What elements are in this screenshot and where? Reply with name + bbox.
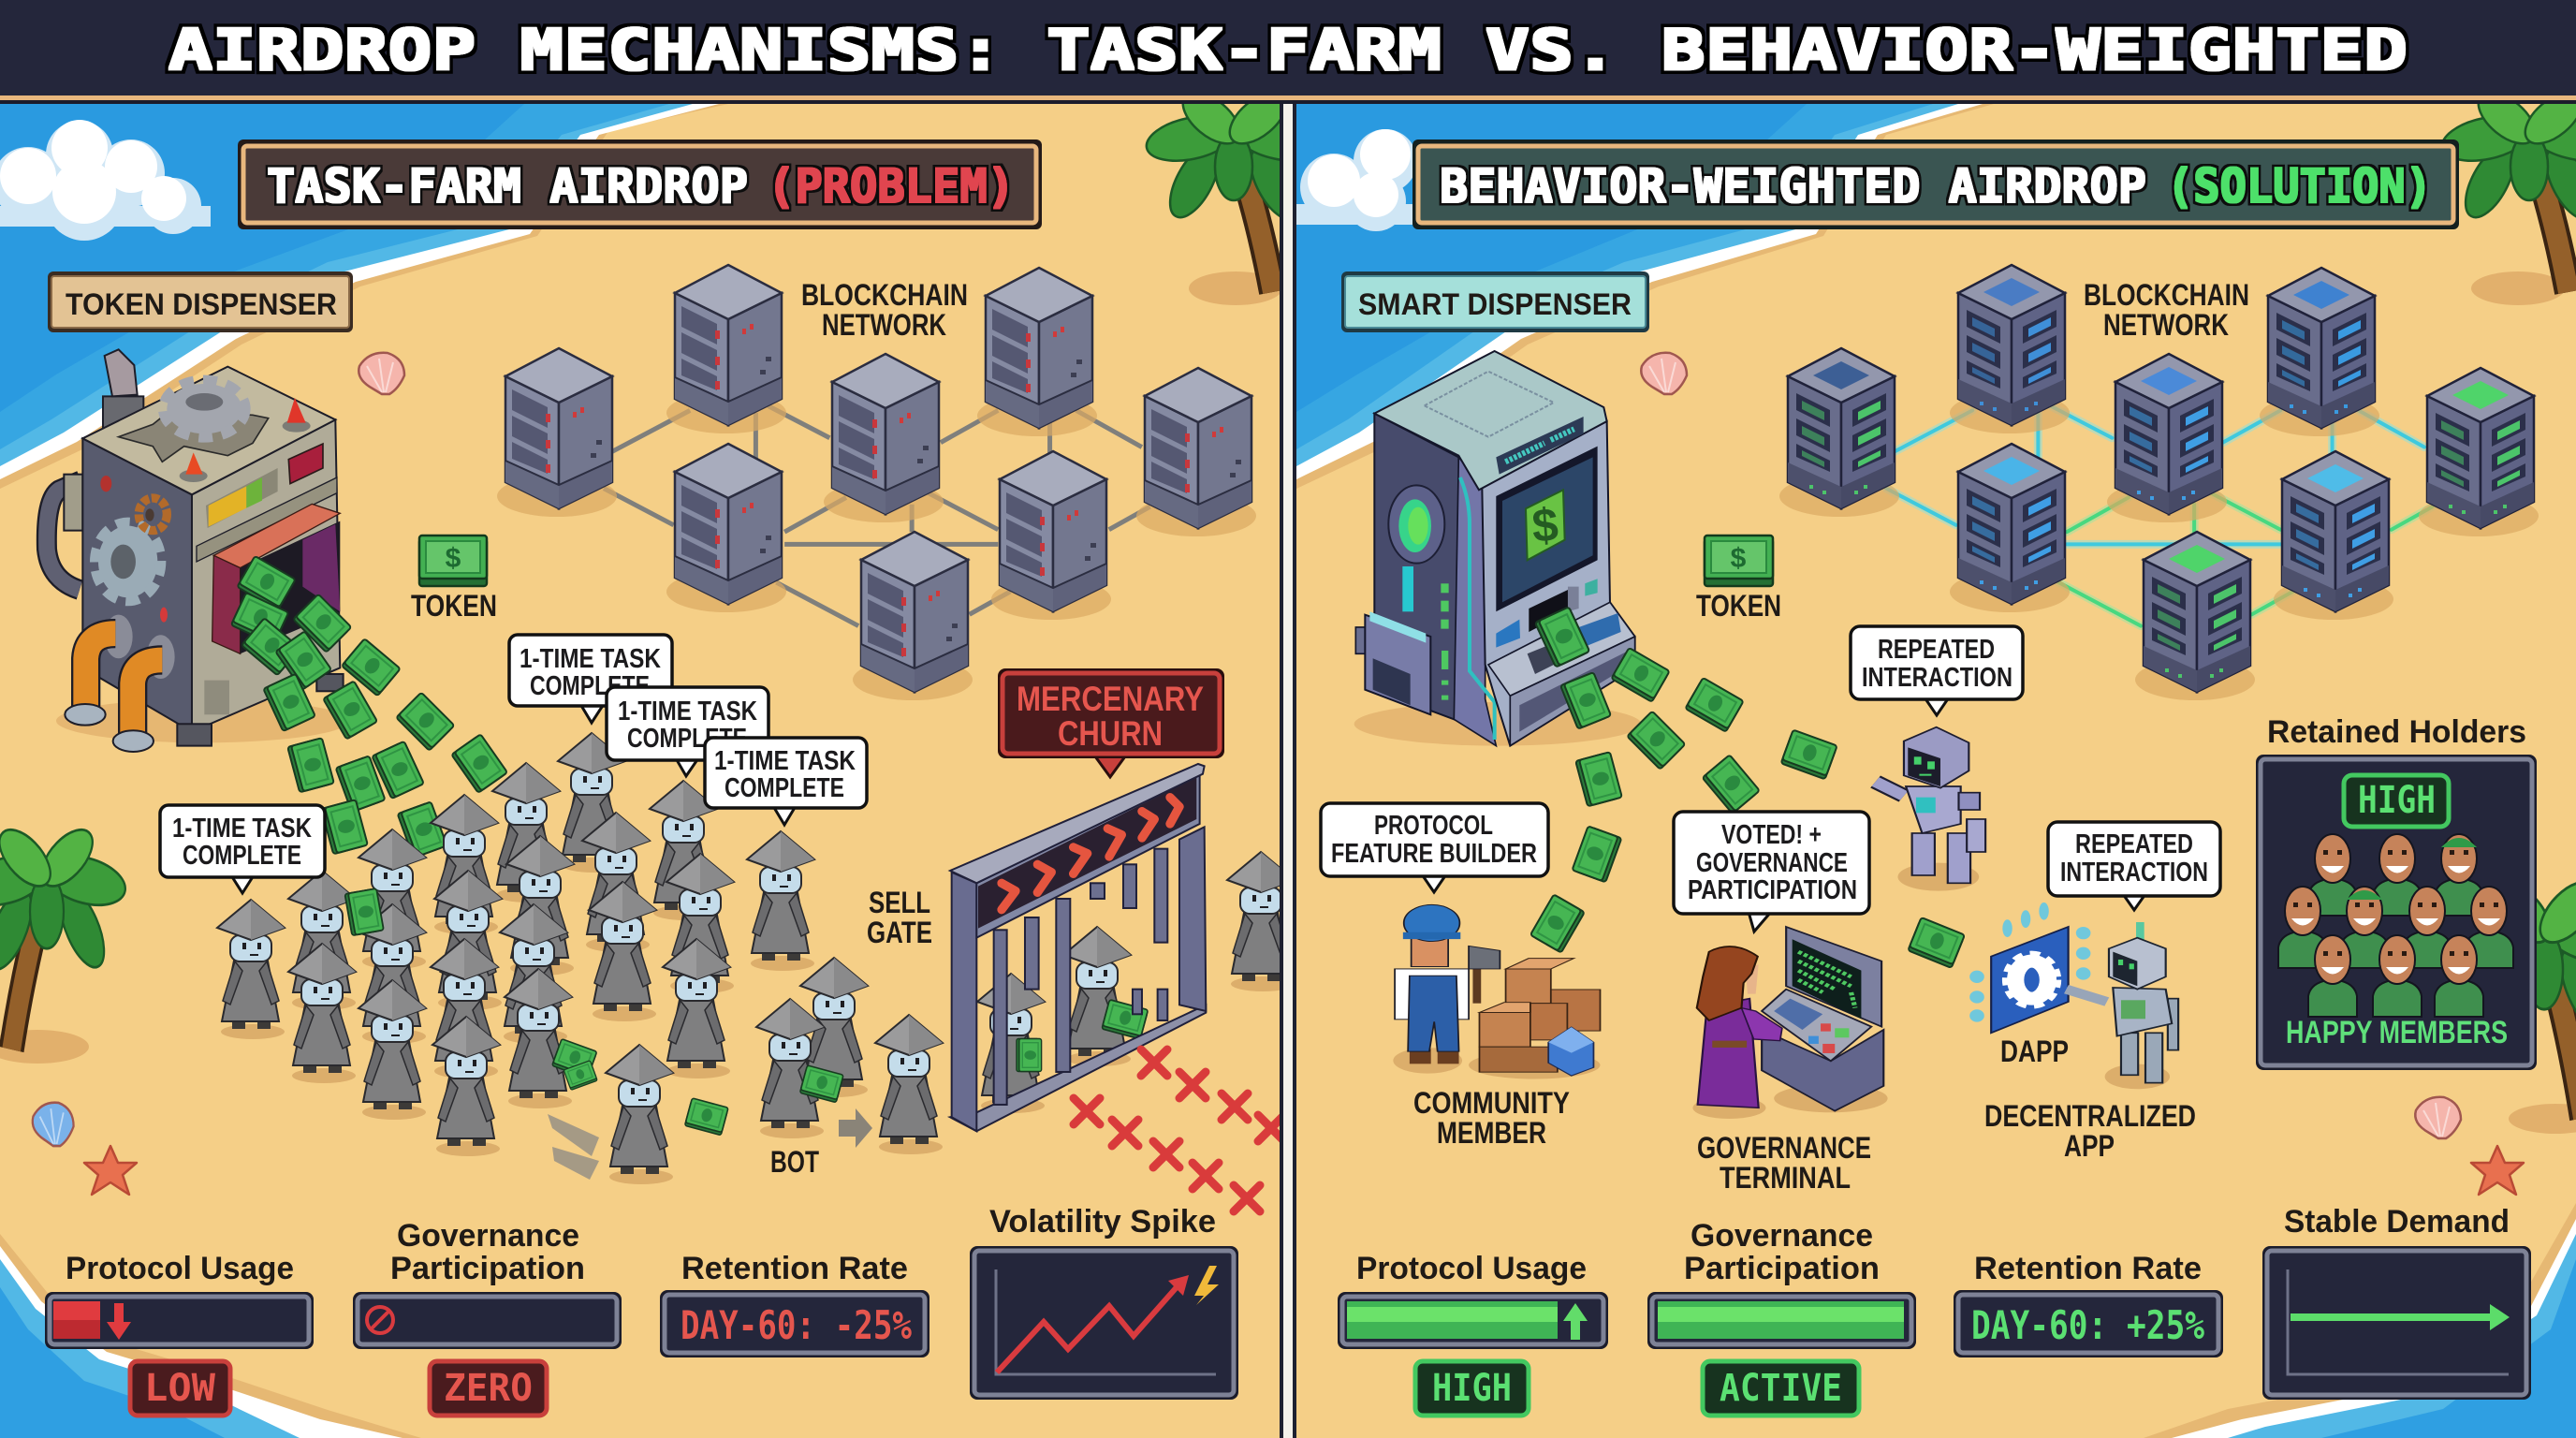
metric: governance participation zero (353, 1218, 622, 1416)
metric: governance participation active: Participation (1684, 1251, 1880, 1286)
callout: voted governance participation: PARTICIPATION (1688, 875, 1857, 905)
chart: stable demand: Stable Demand (2284, 1204, 2510, 1240)
metric: retention rate negative (660, 1251, 929, 1357)
ocean: bottom left (0, 1234, 421, 1438)
callout: repeated interaction dapp (2048, 822, 2220, 910)
callout: 1-time task B: 1-TIME TASK (618, 697, 757, 726)
callout: mercenary churn (998, 668, 1224, 777)
callout: 1-time task C: 1-TIME TASK (714, 746, 856, 776)
callout: repeated interaction dapp: REPEATED (2075, 829, 2193, 859)
callout: repeated interaction robot (1851, 626, 2023, 715)
callout: 1-time task A: 1-TIME TASK (520, 644, 661, 674)
loose tokens held by bots (344, 888, 843, 1136)
label: decentralized app: APP (2064, 1129, 2115, 1163)
callout: voted governance participation (1674, 812, 1869, 932)
metric: retention rate negative: Retention Rate (681, 1251, 908, 1286)
falling tokens (231, 556, 507, 858)
label: happy members: HAPPY MEMBERS (2286, 1015, 2508, 1050)
label: token right: TOKEN (1696, 589, 1781, 623)
seashell (1641, 353, 1687, 394)
label: community member: COMMUNITY (1413, 1086, 1570, 1120)
blockchain servers lit (1779, 265, 2539, 700)
label: token dispenser: TOKEN DISPENSER (66, 287, 337, 321)
callout: repeated interaction robot: REPEATED (1878, 635, 1995, 665)
metric: protocol usage low (45, 1251, 314, 1416)
label: smart dispenser (1341, 271, 1649, 332)
palm shadow (1189, 271, 1282, 305)
metric: retention rate positive: DAY-60: +25% (1971, 1302, 2204, 1348)
panel heading: task-farm: (PROBLEM) (768, 159, 1015, 213)
label: decentralized app: DECENTRALIZED (1984, 1099, 2196, 1133)
palm shadow lower (2509, 1104, 2576, 1134)
label: bot: BOT (770, 1145, 819, 1179)
title: AIRDROP MECHANISMS: TASK-FARM VS. BEHAVIOR-WEIGHTED (168, 18, 2408, 83)
icon: broken token dispenser (47, 349, 349, 752)
network links (604, 405, 1150, 626)
heading: retained holders: Retained Holders (2267, 714, 2526, 750)
falling tokens (1530, 607, 1965, 968)
callout: protocol feature builder: FEATURE BUILDER (1331, 839, 1537, 869)
palm shadow bottom (0, 1030, 89, 1064)
callout: 1-time task A: COMPLETE (530, 671, 650, 701)
icon: token left (419, 536, 487, 586)
palm tree top (1146, 104, 1280, 295)
label: token dispenser (48, 271, 353, 332)
header underline (0, 95, 2576, 100)
panel heading: behavior-weighted (1412, 139, 2459, 229)
starfish (84, 1146, 137, 1195)
icon: token right: $ (1731, 543, 1747, 574)
label: token left: TOKEN (411, 589, 497, 623)
panel divider (1280, 104, 1283, 1438)
character: robot using dapp (1969, 902, 2178, 1089)
metric: protocol usage high: Protocol Usage (1356, 1251, 1587, 1286)
palm tree top (2443, 104, 2576, 295)
icon: token right (1705, 536, 1773, 586)
panel heading: behavior-weighted: BEHAVIOR-WEIGHTED AIRDROP (1440, 159, 2146, 213)
sell gate (950, 764, 1206, 1131)
label: governance terminal (1697, 1131, 1871, 1195)
bots inside gate (977, 927, 1148, 1113)
ocean: top right (1296, 104, 1994, 489)
bot exiting beyond gate (1225, 850, 1280, 991)
metric: retention rate positive (1954, 1251, 2223, 1357)
panel heading: task-farm (238, 139, 1042, 229)
metric: protocol usage high: HIGH (1432, 1367, 1512, 1410)
label: blockchain network left: BLOCKCHAIN (801, 278, 968, 312)
label: blockchain network left: NETWORK (822, 308, 946, 342)
callout: voted governance participation: VOTED! + (1721, 820, 1822, 850)
arrow: toward gate (839, 1108, 872, 1148)
metric: governance participation zero: Participation (390, 1251, 585, 1286)
ocean: bottom right (2144, 1203, 2576, 1438)
label: blockchain network right: BLOCKCHAIN (2084, 278, 2249, 312)
label: sell gate: SELL (869, 886, 930, 919)
callout: 1-time task C: COMPLETE (724, 773, 844, 803)
icon: token left: $ (446, 543, 461, 574)
callout: 1-time task B: COMPLETE (627, 724, 747, 754)
dust puffs (548, 1114, 599, 1180)
chart: volatility spike: Volatility Spike (989, 1204, 1216, 1240)
callout: 1-time task A (509, 635, 672, 723)
label: blockchain network right: NETWORK (2103, 308, 2229, 342)
network links glow (1886, 405, 2433, 626)
blue seashell (33, 1103, 74, 1146)
header bar (0, 0, 2576, 95)
panel heading: behavior-weighted: (SOLUTION) (2167, 159, 2432, 213)
callout: 1-time task D: 1-TIME TASK (172, 814, 312, 844)
callout: repeated interaction dapp: INTERACTION (2060, 858, 2208, 888)
cloud (1296, 129, 1417, 231)
character: robot (1876, 727, 1985, 891)
right beach scene (1296, 82, 2576, 1438)
left beach scene (0, 82, 1327, 1438)
palm shadow (2471, 271, 2565, 305)
seashell lower (2415, 1097, 2461, 1138)
metric: governance participation active: ACTIVE (1720, 1367, 1842, 1410)
character: governance terminal user (1692, 927, 1888, 1119)
character: community member builder (1393, 904, 1600, 1078)
token on dispenser screen: $ (1530, 498, 1560, 552)
callout: protocol feature builder: PROTOCOL (1374, 811, 1493, 841)
palm tree lower right (2537, 882, 2576, 1122)
label: governance terminal: TERMINAL (1720, 1161, 1851, 1195)
label: dapp: DAPP (2000, 1034, 2069, 1068)
panel heading: task-farm: TASK-FARM AIRDROP (267, 159, 748, 213)
callout: 1-time task D: COMPLETE (183, 841, 301, 871)
label: governance terminal: GOVERNANCE (1697, 1131, 1871, 1165)
blockchain servers (497, 265, 1256, 700)
label: sell gate: GATE (867, 916, 932, 949)
bot crowd (217, 733, 943, 1184)
callout: mercenary churn: CHURN (1058, 714, 1163, 753)
callout: mercenary churn: MERCENARY (1017, 680, 1204, 718)
label: blockchain network left (801, 278, 968, 342)
metric: retention rate negative: DAY-60: -25% (681, 1302, 912, 1348)
seashell (359, 353, 404, 394)
metric: governance participation active (1647, 1218, 1916, 1416)
chart: volatility spike (970, 1204, 1238, 1400)
ocean: top left (0, 104, 728, 489)
cloud (0, 120, 211, 241)
label: community member (1413, 1086, 1570, 1150)
metric: protocol usage low: LOW (144, 1367, 216, 1410)
palm tree bottom (0, 819, 129, 1049)
callout: 1-time task B (607, 687, 768, 776)
metric: protocol usage low: Protocol Usage (66, 1251, 294, 1286)
starfish (2471, 1146, 2524, 1195)
label: community member: MEMBER (1437, 1116, 1546, 1150)
metric: retention rate positive: Retention Rate (1974, 1251, 2202, 1286)
label: decentralized app (1984, 1099, 2196, 1163)
chart: stable demand (2262, 1204, 2531, 1400)
label: sell gate (867, 886, 932, 949)
callout: voted governance participation: GOVERNANCE (1696, 848, 1848, 878)
callout: 1-time task C (705, 738, 867, 825)
panel: retained holders (2256, 755, 2537, 1070)
churn trail of red x marks (1074, 1049, 1284, 1211)
callout: repeated interaction robot: INTERACTION (1862, 663, 2012, 693)
callout: 1-time task D (160, 805, 325, 893)
metric: governance participation active: Governance (1690, 1218, 1873, 1254)
icon: smart dispenser (1354, 351, 1641, 746)
badge: high: HIGH (2358, 779, 2436, 822)
metric: governance participation zero: ZERO (444, 1367, 533, 1410)
metric: governance participation zero: Governance (397, 1218, 579, 1254)
metric: protocol usage high (1338, 1251, 1608, 1416)
label: smart dispenser: SMART DISPENSER (1358, 287, 1632, 321)
happy members group (2278, 834, 2513, 1017)
label: blockchain network right (2084, 278, 2249, 342)
callout: protocol feature builder (1321, 803, 1548, 892)
